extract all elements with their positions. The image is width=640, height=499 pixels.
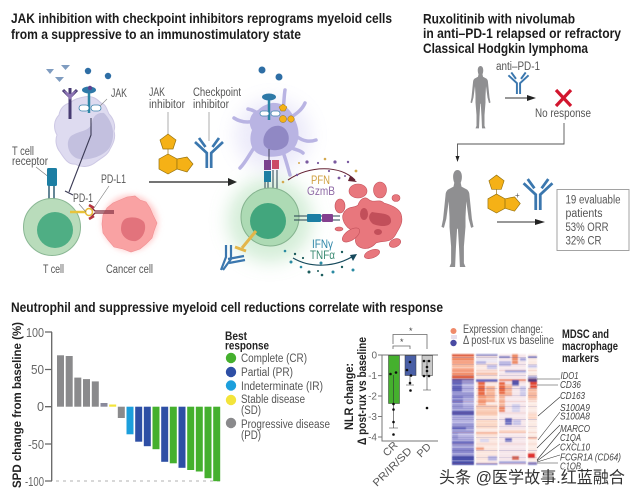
legend: best response xyxy=(225,331,330,442)
y axis title: SPD change from baseline (%) xyxy=(10,322,24,488)
chart labels: gene markers: CD163 xyxy=(560,390,585,402)
callout: results box: 53% ORR xyxy=(566,222,608,234)
arrow: to results xyxy=(497,219,545,225)
data points xyxy=(389,360,430,436)
panel: suppressive state diagram xyxy=(12,65,158,276)
label: T cell name: T cell xyxy=(43,264,64,276)
legend: expression change: Δ post-rux vs baseline xyxy=(463,335,554,347)
icon: activated T cell xyxy=(241,160,299,246)
icon: activated myeloid cell xyxy=(234,66,316,175)
y axis: -50 xyxy=(28,437,44,452)
baseline dashed line xyxy=(56,480,220,482)
chart labels: gene markers: S100A9 xyxy=(560,402,590,414)
legend: expression change: Expression change: xyxy=(463,324,543,336)
heading: MDSC markers: markers xyxy=(562,353,599,365)
axis and ticks: -4 xyxy=(368,432,377,444)
title: main heading xyxy=(11,10,392,42)
x labels: PR/IR/SD xyxy=(371,445,415,489)
y axis: 50 xyxy=(31,362,44,377)
icon: cytokine release arrow xyxy=(284,250,357,276)
y axis titles: NLR change: xyxy=(342,363,356,430)
icon: ruxolitinib molecule xyxy=(488,175,520,213)
label: Checkpoint inhibitor: Checkpoint xyxy=(193,87,242,99)
heading: neutrophil section: Neutrophil and suppressive myeloid cell reductions correlate with response xyxy=(11,299,443,315)
panel: immunostimulatory state diagram xyxy=(221,66,402,276)
label: JAK inhibitor xyxy=(149,87,185,134)
arrow: connector to second patient xyxy=(456,123,564,162)
icon: T cell to tumor synapse xyxy=(294,214,340,222)
x labels xyxy=(371,439,434,489)
label: IFNy: IFNγ xyxy=(312,239,333,251)
y axis: 100 xyxy=(26,325,44,340)
y axis titles xyxy=(342,337,369,445)
label: Cancer cell name: Cancer cell xyxy=(106,264,153,276)
label: Checkpoint inhibitor: inhibitor xyxy=(193,99,229,111)
legend: best response: (PD) xyxy=(241,430,261,442)
callout: results box xyxy=(557,190,629,250)
heading: Ruxolitinib trial: Classical Hodgkin lymphoma xyxy=(423,40,588,56)
label: JAK: JAK xyxy=(111,88,127,100)
label: PD-L1: PD-L1 xyxy=(101,174,126,186)
label: PFN: PFN xyxy=(311,175,330,187)
label: T cell receptor: receptor xyxy=(12,156,48,168)
icon: checkpoint antibody on T cell xyxy=(221,231,256,270)
watermark: 头条 @医学故事.红蓝融合 xyxy=(439,468,625,487)
chart labels: gene markers: MARCO xyxy=(560,423,590,435)
bars xyxy=(388,356,432,428)
title: main heading: from a suppressive to an immunostimulatory state xyxy=(11,26,301,42)
icon: PD-1 and PD-L1 binding xyxy=(70,205,114,219)
icon: red X xyxy=(556,90,571,106)
callout: results box: 32% CR xyxy=(566,236,602,248)
arrow: treatment transition xyxy=(149,178,237,186)
label: JAK inhibitor: inhibitor xyxy=(149,99,185,111)
legend: best response: (SD) xyxy=(241,405,261,417)
heading: Ruxolitinib trial xyxy=(423,10,621,56)
waterfall bars xyxy=(57,355,220,481)
legend: best response: Indeterminate (IR) xyxy=(241,381,323,393)
chart labels: gene markers: IDO1 xyxy=(560,370,578,382)
legend: best response: Complete (CR) xyxy=(241,353,307,365)
label: T cell receptor xyxy=(12,146,50,178)
axis and ticks: -2 xyxy=(368,392,377,402)
icon: cancer cell xyxy=(102,195,158,252)
title: main heading: JAK inhibition with checkpoint inhibitors reprograms myeloid cells xyxy=(11,10,392,26)
label: PD-L1 xyxy=(94,174,126,208)
callout: results box: patients xyxy=(566,208,603,220)
label: TNFa: TNFα xyxy=(310,250,335,262)
axis and ticks: -1 xyxy=(368,371,377,382)
chart labels: gene markers: CD36 xyxy=(560,379,581,391)
label: JAK inhibitor: JAK xyxy=(149,87,165,99)
icon: T cell xyxy=(24,168,80,256)
x labels: PD xyxy=(415,441,434,460)
icon: cytotoxic granule arrow xyxy=(282,158,357,183)
callout: results box: 19 evaluable xyxy=(566,194,620,206)
chart: heatmap xyxy=(452,354,537,465)
label: PD-1: PD-1 xyxy=(73,193,93,205)
arrow: to no response xyxy=(505,95,536,101)
icon: JAK inhibitor molecule xyxy=(159,134,193,174)
y axis: -100 xyxy=(25,474,44,489)
legend: best response: response xyxy=(225,340,269,352)
icon: first patient xyxy=(470,66,490,128)
heading: MDSC markers xyxy=(562,329,618,365)
column 4 xyxy=(528,354,537,465)
heading: Ruxolitinib trial: Ruxolitinib with nivolumab xyxy=(423,10,575,26)
icon: myeloid cell xyxy=(55,86,115,195)
icon: nivolumab antibody xyxy=(524,179,552,210)
chart labels: gene markers: C1QB xyxy=(560,460,581,472)
legend: expression change xyxy=(450,324,554,347)
label: GzmB: GzmB xyxy=(307,186,335,198)
panel: trial design xyxy=(442,61,629,267)
panel: treatment inputs xyxy=(149,87,242,186)
heading: MDSC markers: MDSC and xyxy=(562,329,609,341)
icon: second patient xyxy=(442,170,474,267)
significance brackets: * xyxy=(400,337,404,347)
axis and ticks: 0 xyxy=(371,350,377,362)
icon: anti-PD-1 antibody xyxy=(508,72,529,94)
label: plus: + xyxy=(515,191,520,200)
label: PD-1 xyxy=(73,193,93,212)
chart labels: gene markers: CXCL10 xyxy=(560,442,590,454)
column 2 xyxy=(476,354,498,465)
label: T cell receptor: T cell xyxy=(12,146,34,158)
chart: NLR change xyxy=(342,326,438,489)
heading: MDSC markers: macrophage xyxy=(562,341,618,353)
chart labels: gene markers: C1QA xyxy=(560,432,581,444)
significance brackets xyxy=(393,326,427,349)
legend: best response: Stable disease xyxy=(241,394,305,406)
legend: best response: Best xyxy=(225,331,247,343)
column 3 xyxy=(499,354,526,465)
chart labels: gene markers: S100A8 xyxy=(560,410,590,422)
icon: checkpoint antibody xyxy=(195,138,223,168)
label: Checkpoint inhibitor xyxy=(193,87,242,141)
legend: best response: Progressive disease xyxy=(241,419,330,431)
column 1 xyxy=(452,354,474,465)
chart labels: gene markers xyxy=(537,370,621,472)
chart labels: gene markers: FCGR1A (CD64) xyxy=(560,452,621,464)
icon: lysing tumor cell xyxy=(335,182,402,260)
y axis: 0 xyxy=(37,399,44,414)
label: No response: No response xyxy=(535,108,591,120)
y axis titles: Δ post-rux vs baseline xyxy=(355,337,369,445)
x labels: CR xyxy=(381,439,401,459)
chart: SPD waterfall xyxy=(10,322,220,489)
label: anti-PD-1: anti–PD-1 xyxy=(496,61,540,73)
legend: best response: Partial (PR) xyxy=(241,367,293,379)
icon: cytokine triangles and dots xyxy=(46,65,111,82)
axis and ticks: -3 xyxy=(368,412,377,423)
y axis xyxy=(25,325,52,489)
significance brackets: * xyxy=(409,326,413,336)
axis and ticks xyxy=(368,350,438,444)
